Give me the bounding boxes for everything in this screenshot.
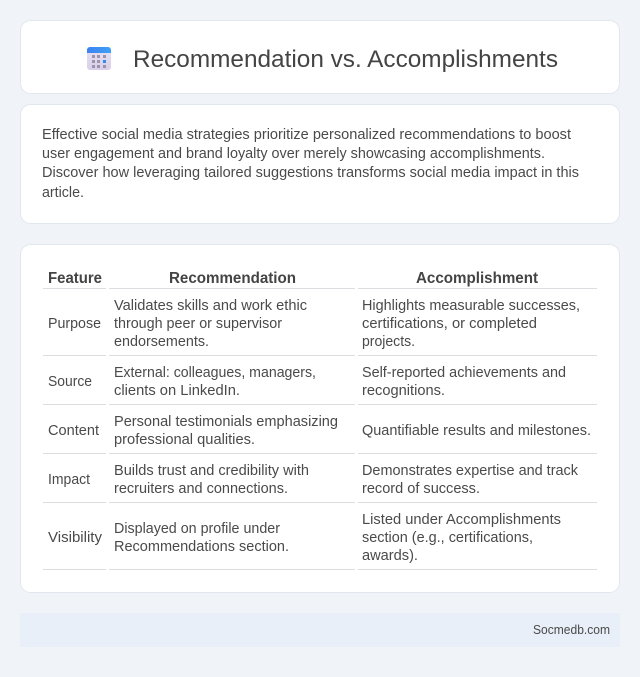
row: Visibility: Recommendations section. [114,539,289,555]
icon: calendar [87,47,111,70]
table header: Accomplishment [416,270,538,287]
table header [48,270,538,287]
table header: Recommendation [169,270,296,287]
panel: comparison table [20,244,620,592]
row: Impact: Impact [48,472,90,488]
row: Content [48,414,591,448]
row: Purpose: Purpose [48,316,101,332]
row: Impact: Demonstrates expertise and track [362,463,579,479]
row: Source: Self-reported achievements and [362,365,566,381]
row: Content: Content [48,423,99,439]
row: Purpose [48,298,580,350]
intro text: Effective social media strategies prioritize personalized recommendations to boost [42,127,571,143]
row: Impact: recruiters and connections. [114,481,288,497]
header panel [20,20,620,94]
row: Purpose: endorsements. [114,334,209,350]
row: Impact: Builds trust and credibility with [114,463,309,479]
row: Source [48,365,566,399]
intro text: article. [42,185,84,201]
row: Visibility: Displayed on profile under [114,521,280,537]
footer bar [20,613,620,647]
title: Recommendation vs. Accomplishments [133,46,558,73]
row: Content: Quantifiable results and milestones. [362,423,591,439]
row: Purpose: through peer or supervisor [114,316,282,332]
row: Visibility: awards). [362,548,418,564]
row: Purpose: Validates skills and work ethic [114,298,307,314]
row: Visibility [48,512,561,564]
row: Source: Source [48,374,92,390]
row: Source: clients on LinkedIn. [114,383,240,399]
row: Impact: record of success. [362,481,480,497]
footer text: Socmedb.com [533,623,610,637]
row: Purpose: certifications, or completed [362,316,537,332]
row: Visibility: Listed under Accomplishments [362,512,561,528]
row: Impact [48,463,579,497]
row: Content: professional qualities. [114,432,255,448]
row: Source: External: colleagues, managers, [114,365,316,381]
row: Visibility: Visibility [48,530,103,546]
intro text: user engagement and brand loyalty over merely showcasing accomplishments. [42,146,545,162]
row: Source: recognitions. [362,383,445,399]
row: Purpose: projects. [362,334,415,350]
row: Content: Personal testimonials emphasizing [114,414,338,430]
intro text: Discover how leveraging tailored suggestions transforms social media impact in this [42,165,579,181]
intro text [42,127,579,201]
table header: Feature [48,270,102,287]
row: Purpose: Highlights measurable successes, [362,298,580,314]
panel: intro [20,104,620,224]
row: Visibility: section (e.g., certifications, [362,530,533,546]
